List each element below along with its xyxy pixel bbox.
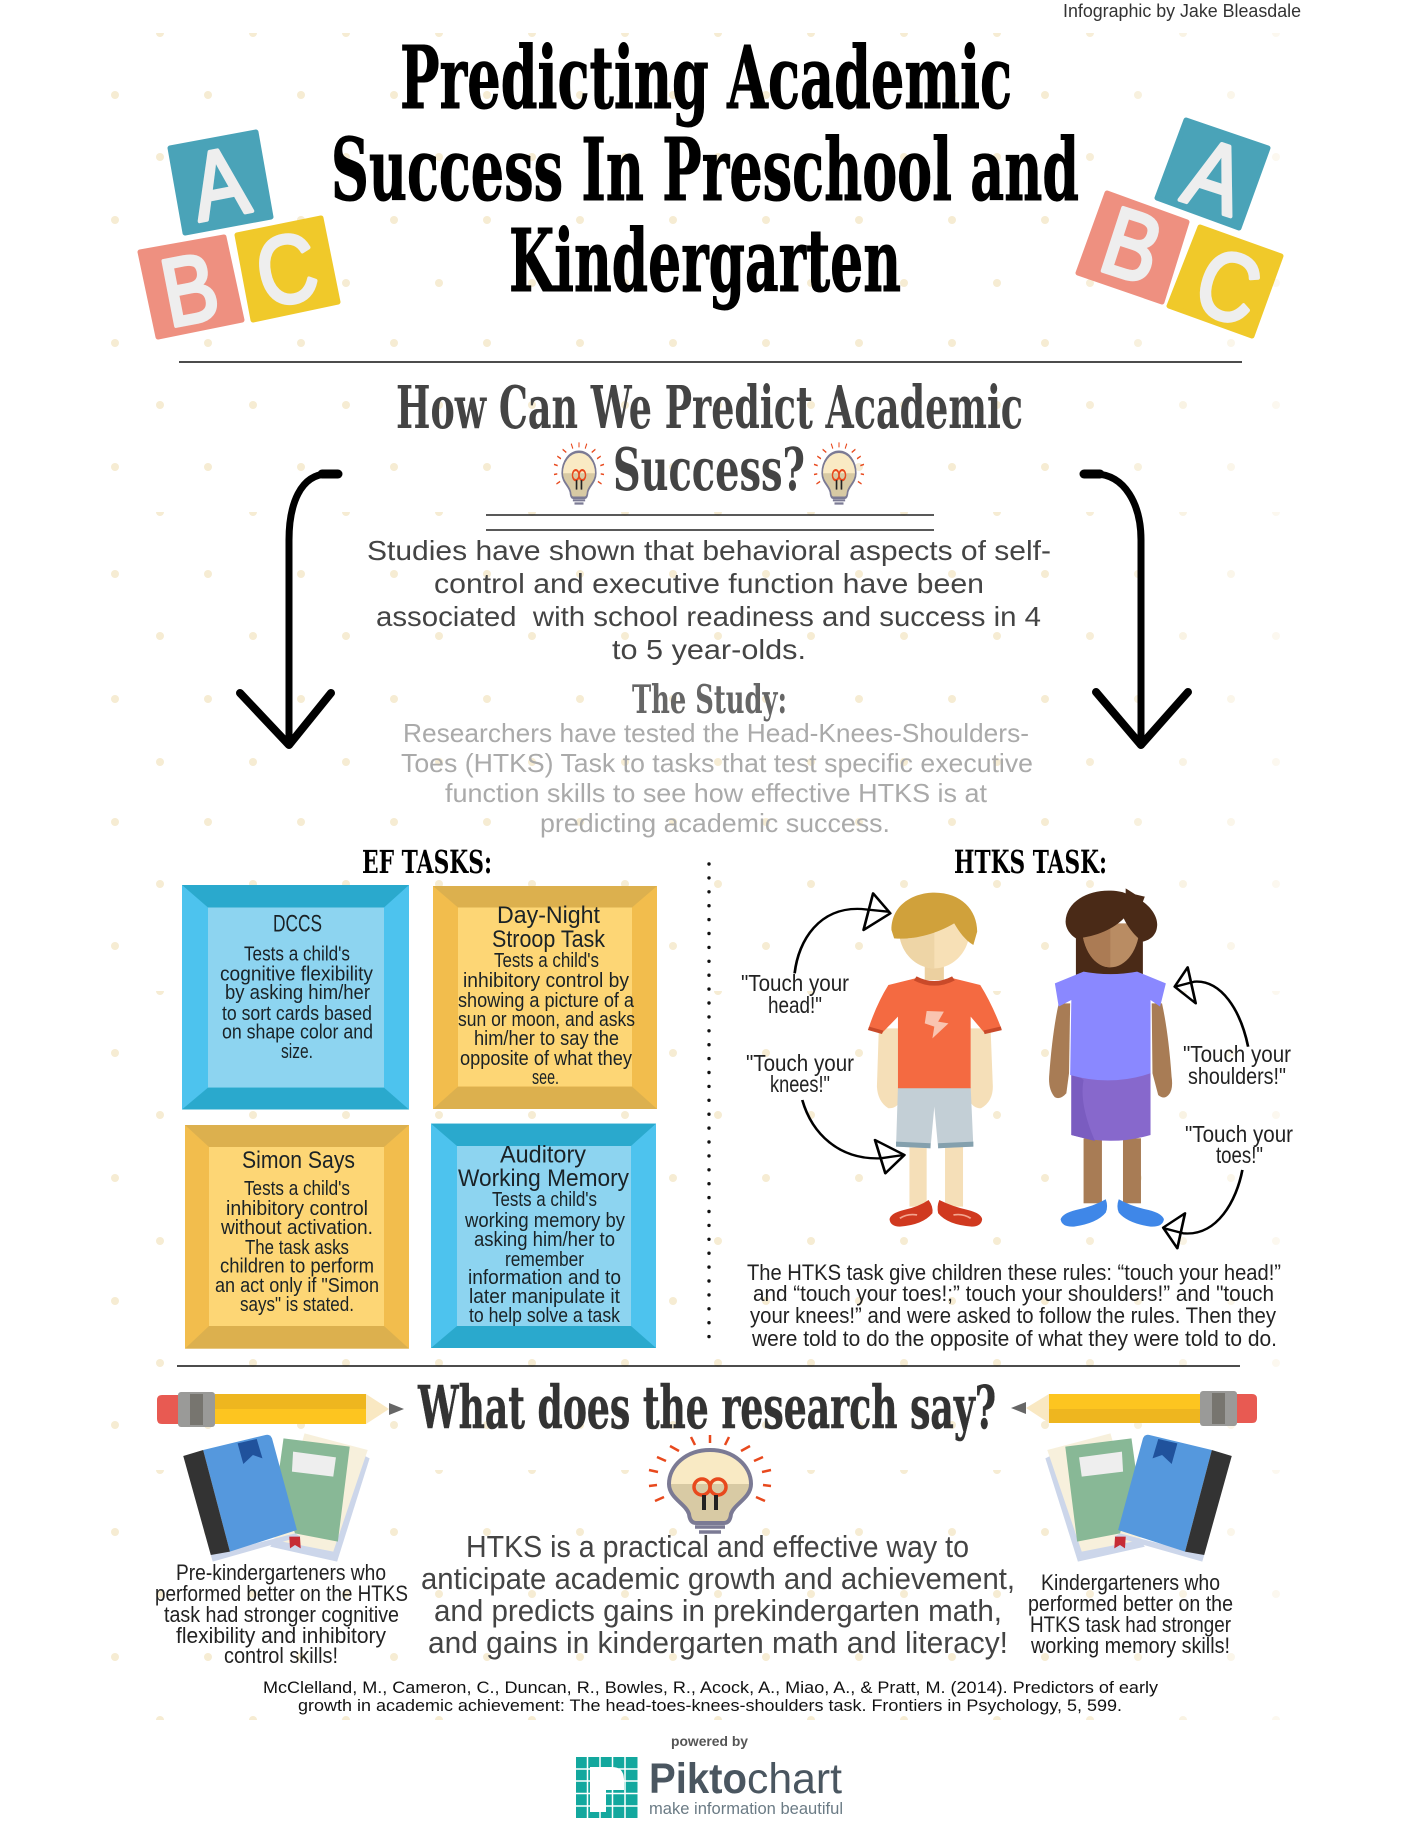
panel: Auditory Working Memory: Working Memory	[458, 1165, 629, 1192]
heading: EF tasks: EF TASKS:	[362, 843, 492, 881]
panel: Auditory Working Memory: information and to	[468, 1267, 621, 1289]
panel: DCCS: cognitive flexibility	[220, 963, 373, 985]
panel: Auditory Working Memory: working memory by	[464, 1210, 625, 1232]
label: touch your knees	[746, 1050, 854, 1097]
arrow: touch head	[795, 893, 890, 973]
label: touch your toes	[1185, 1121, 1293, 1168]
heading: how can we predict: Success?	[613, 435, 805, 504]
logo: Piktochart wordmark	[649, 1755, 843, 1818]
label: touch your head: head!"	[768, 992, 822, 1018]
arrow: touch toes	[1163, 1170, 1242, 1248]
panel: Simon Says: says" is stated.	[240, 1294, 354, 1316]
arrow: right down	[1084, 474, 1188, 745]
panel: Day-Night Stroop Task: Stroop Task	[492, 926, 606, 953]
panel: Auditory Working Memory: later manipulate it	[469, 1286, 620, 1308]
citation: McClelland, M., Cameron, C., Duncan, R., Bowles, R., Acock, A., Miao, A., & Pratt, M. (2014). Predictors of early	[263, 1678, 1159, 1697]
panel: Day-Night Stroop Task	[433, 886, 657, 1109]
title	[331, 28, 1079, 312]
text: pre-kindergarteners: task had stronger cognitive	[164, 1602, 399, 1627]
panel: Auditory Working Memory: to help solve a task	[469, 1305, 621, 1327]
text: pre-kindergarteners: flexibility and inhibitory	[176, 1623, 386, 1648]
text: main conclusion	[421, 1529, 1015, 1660]
panel: DCCS: by asking him/her	[225, 982, 370, 1004]
label: touch your shoulders	[1183, 1041, 1291, 1089]
heading: how can we predict: How Can We Predict Academic	[396, 373, 1023, 442]
text: pre-kindergarteners: control skills!	[224, 1643, 338, 1668]
text: pre-kindergarteners: performed better on the HTKS	[155, 1581, 408, 1606]
heading: HTKS task: HTKS TASK:	[954, 843, 1107, 881]
text: kindergarteners: performed better on the	[1028, 1591, 1233, 1616]
label: touch your shoulders: shoulders!"	[1188, 1063, 1286, 1089]
arrow: touch knees	[802, 1100, 904, 1173]
panel: Day-Night Stroop Task: Day-Night	[497, 902, 600, 929]
figure: boy	[868, 893, 1001, 1227]
icon: ABC blocks left	[140, 125, 338, 347]
citation: growth in academic achievement: The head-toes-knees-shoulders task. Frontiers in Psychology, 5, 599.	[298, 1696, 1122, 1715]
label: touch your toes: toes!"	[1216, 1142, 1263, 1168]
panel: Auditory Working Memory: Auditory	[500, 1142, 586, 1169]
study text block: predicting academic success.	[540, 808, 890, 838]
panel: Simon Says: The task asks	[245, 1237, 349, 1259]
label: touch your shoulders: "Touch your	[1183, 1041, 1291, 1067]
text: main conclusion: and predicts gains in prekindergarten math,	[434, 1593, 1002, 1628]
text: main conclusion: and gains in kindergarten math and literacy!	[428, 1625, 1008, 1660]
icon: ABC blocks left: A	[183, 125, 257, 241]
intro text block: Studies have shown that behavioral aspects of self-	[367, 535, 1051, 566]
panel: Simon Says: an act only if "Simon	[215, 1275, 379, 1297]
label: touch your head: "Touch your	[741, 970, 849, 996]
panel: Day-Night Stroop Task: showing a picture of a	[458, 990, 635, 1012]
icon: books right	[1045, 1433, 1232, 1562]
icon: large bulb	[649, 1435, 771, 1532]
HTKS description text: your knees!” and were asked to follow the rules. Then they	[750, 1303, 1276, 1328]
intro text block: control and executive function have been	[434, 568, 984, 599]
title: Kindergarten	[509, 211, 901, 312]
panel: DCCS	[182, 885, 409, 1110]
citation	[263, 1678, 1159, 1715]
intro text block: to 5 year-olds.	[612, 634, 806, 665]
icon: small bulb right	[814, 442, 864, 503]
panel: Auditory Working Memory: asking him/her to	[474, 1229, 615, 1251]
credit line: Infographic by Jake Bleasdale	[1063, 1, 1301, 21]
panel: Simon Says: inhibitory control	[226, 1198, 368, 1220]
icon: books left	[183, 1433, 370, 1562]
logo: Piktochart wordmark: chart	[747, 1755, 842, 1803]
panel: Simon Says: Tests a child's	[244, 1178, 350, 1200]
heading: the study: The Study:	[632, 677, 787, 723]
panel: Auditory Working Memory	[431, 1124, 656, 1348]
panel: Day-Night Stroop Task: Tests a child's	[494, 950, 599, 972]
panel: DCCS: to sort cards based	[222, 1003, 372, 1025]
intro text block: associated with school readiness and success in 4	[376, 601, 1041, 632]
intro text block	[367, 535, 1051, 665]
title: Predicting Academic	[400, 28, 1012, 129]
label: touch your knees: "Touch your	[746, 1050, 854, 1076]
text: pre-kindergarteners	[155, 1560, 408, 1668]
icon: ABC blocks right: C	[1184, 226, 1273, 347]
icon: pencil left	[157, 1392, 404, 1427]
panel: DCCS: Tests a child's	[244, 944, 350, 966]
icon: pencil right	[1011, 1391, 1257, 1426]
label: touch your knees: knees!"	[770, 1071, 830, 1097]
panel: Simon Says: children to perform	[220, 1256, 374, 1278]
arrow: left down	[240, 474, 338, 745]
text: kindergarteners: HTKS task had stronger	[1030, 1612, 1231, 1637]
icon: ABC blocks left: B	[153, 231, 227, 347]
heading: what does the research say: What does the research say?	[417, 1373, 996, 1442]
HTKS description text	[747, 1260, 1281, 1351]
icon: ABC blocks right: B	[1090, 186, 1175, 305]
study text block: function skills to see how effective HTKS is at	[445, 778, 988, 808]
text: kindergarteners: Kindergarteners who	[1041, 1570, 1220, 1595]
panel: DCCS: DCCS	[273, 910, 322, 937]
study text block: Researchers have tested the Head-Knees-Shoulders-	[403, 718, 1029, 748]
label: touch your toes: "Touch your	[1185, 1121, 1293, 1147]
text: main conclusion: HTKS is a practical and effective way to	[466, 1529, 969, 1564]
heading: how can we predict	[396, 373, 1023, 504]
icon: ABC blocks right: A	[1173, 117, 1258, 236]
HTKS description text: were told to do the opposite of what they were told to do.	[751, 1326, 1277, 1351]
panel: Day-Night Stroop Task: him/her to say the	[474, 1028, 619, 1050]
HTKS description text: and “touch your toes!;” touch your shoulders!” and "touch	[753, 1281, 1274, 1306]
study text block: Toes (HTKS) Task to tasks that test specific executive	[401, 748, 1033, 778]
panel: Day-Night Stroop Task: sun or moon, and asks	[458, 1009, 635, 1031]
logo: Piktochart wordmark: Pikto	[649, 1755, 747, 1803]
label: touch your head	[741, 970, 849, 1018]
logo: Piktochart wordmark: make information beautiful	[649, 1799, 843, 1818]
icon: ABC blocks left: C	[247, 211, 326, 328]
panel: Day-Night Stroop Task: opposite of what they	[460, 1048, 632, 1070]
panel: Day-Night Stroop Task: inhibitory control by	[463, 970, 629, 992]
HTKS description text: The HTKS task give children these rules: “touch your head!”	[747, 1260, 1281, 1285]
panel: DCCS: on shape color and	[222, 1022, 373, 1044]
study text block	[401, 718, 1033, 838]
panel: Simon Says: without activation.	[220, 1217, 373, 1239]
arrow: touch shoulders	[1175, 967, 1248, 1047]
panel: Simon Says	[185, 1125, 409, 1349]
panel: Day-Night Stroop Task: see.	[532, 1067, 559, 1089]
panel: Auditory Working Memory: Tests a child's	[492, 1189, 597, 1211]
panel: DCCS: size.	[281, 1041, 313, 1063]
logo: Piktochart icon	[576, 1757, 638, 1818]
text: main conclusion: anticipate academic growth and achievement,	[421, 1561, 1015, 1596]
text: kindergarteners: working memory skills!	[1030, 1633, 1230, 1658]
icon: ABC blocks right	[1078, 117, 1281, 347]
text: pre-kindergarteners: Pre-kindergarteners who	[176, 1560, 386, 1585]
icon: small bulb left	[554, 442, 604, 503]
figure: girl	[1049, 888, 1172, 1227]
text: kindergarteners	[1028, 1570, 1233, 1658]
powered by label: powered by	[671, 1733, 748, 1749]
panel: Auditory Working Memory: remember	[505, 1249, 584, 1271]
panel: Simon Says: Simon Says	[242, 1147, 355, 1174]
